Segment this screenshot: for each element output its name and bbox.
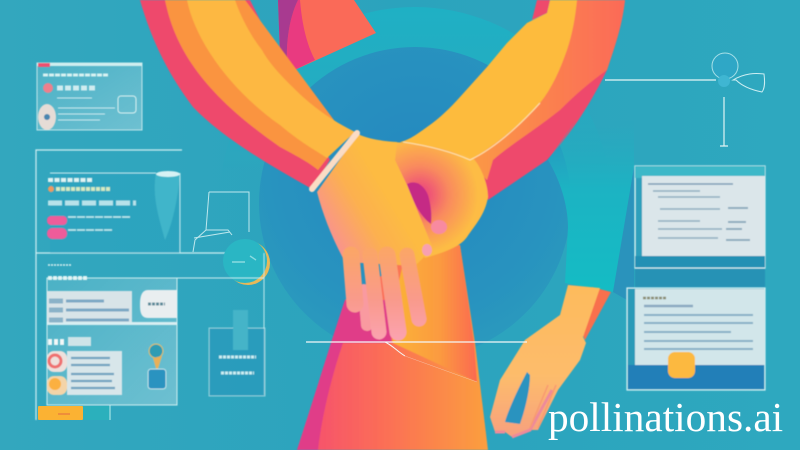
small top pink shape <box>532 0 550 20</box>
panel: top left card <box>37 63 142 130</box>
arm fold line <box>403 103 540 160</box>
white pill <box>140 290 177 318</box>
sleeve right <box>548 120 634 300</box>
list card <box>67 351 122 395</box>
left arm <box>140 0 355 189</box>
main lower left card <box>47 253 264 405</box>
teal circle icon with crescent <box>223 239 270 285</box>
device sketch <box>193 192 249 252</box>
watermark: pollinations.ai <box>548 394 783 440</box>
panel: left outline and text box <box>36 150 265 420</box>
fingers <box>351 255 419 332</box>
wristband <box>312 133 357 189</box>
left hand palm <box>317 134 432 266</box>
lower right hand <box>490 285 611 437</box>
tag icon <box>148 344 166 389</box>
right arm <box>400 0 625 200</box>
dress <box>297 245 488 450</box>
bulb connector top right <box>605 53 765 146</box>
small icons row <box>48 339 64 345</box>
yellow button <box>668 352 695 378</box>
fingernail <box>422 244 432 256</box>
panel: right upper document <box>635 166 765 288</box>
figure: body and arms <box>140 0 625 450</box>
table rows <box>47 291 177 325</box>
blue circle behind figure <box>219 7 611 399</box>
horizontal line across figure <box>306 342 527 382</box>
blue box with tube <box>209 310 265 396</box>
orange footer button <box>38 405 111 420</box>
panel: right lower document <box>627 288 765 390</box>
right hand gripping <box>390 142 488 258</box>
badges <box>47 351 67 395</box>
top triangle garment <box>278 0 376 73</box>
